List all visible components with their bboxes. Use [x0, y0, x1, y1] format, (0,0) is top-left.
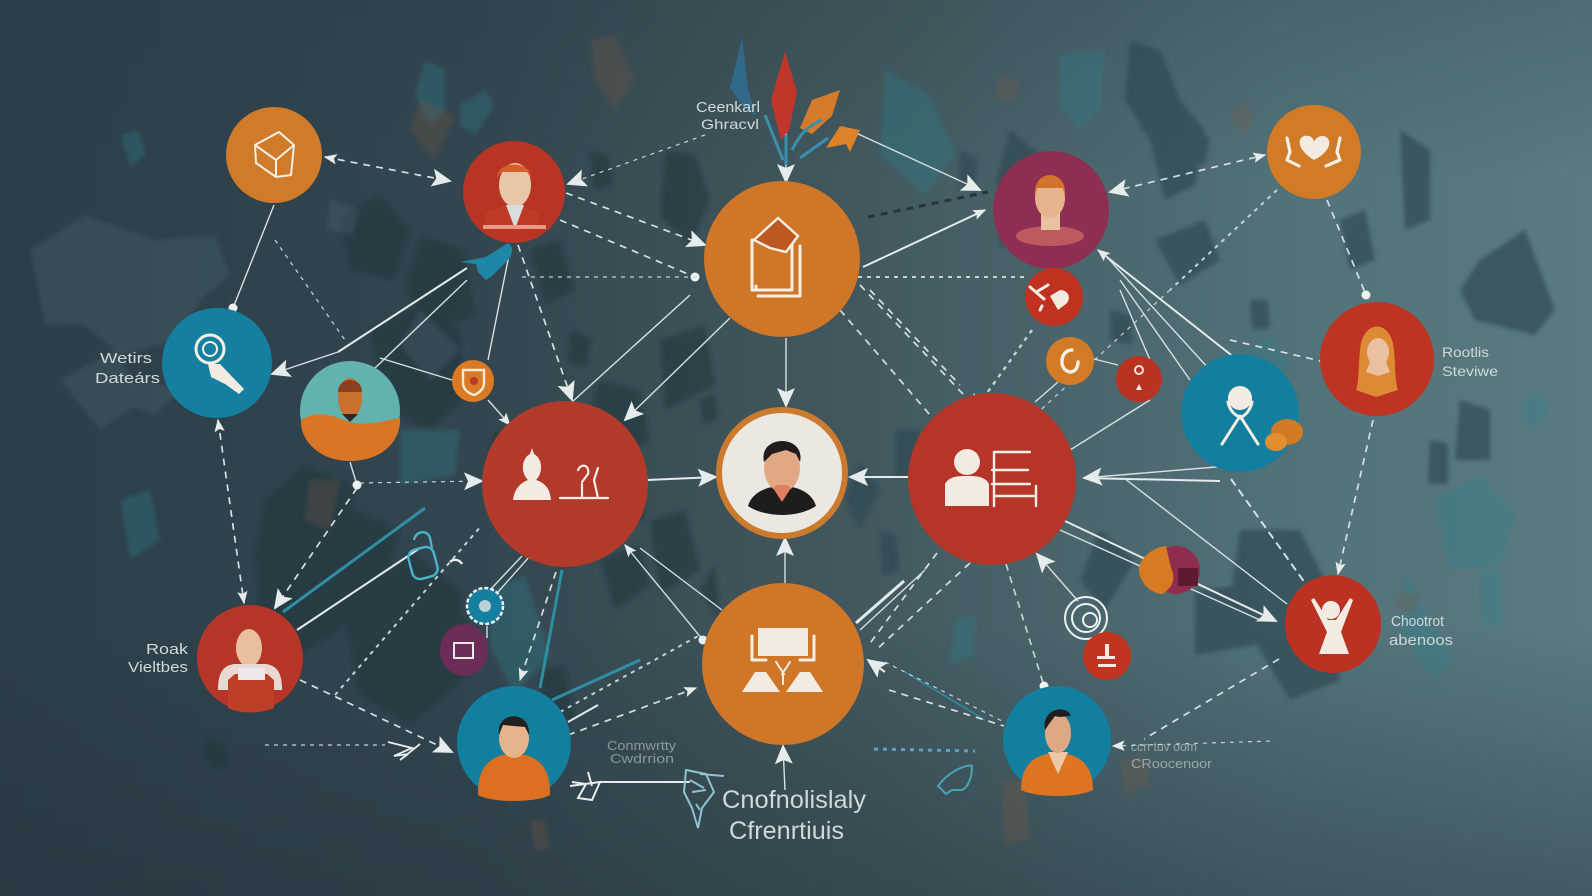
- node: plum person: [993, 151, 1109, 269]
- node: centre person: [716, 407, 848, 539]
- icon: orange and plum pie: [1139, 546, 1200, 594]
- node: red person top: [463, 141, 565, 243]
- label: main bottom caption: Cnofnolislaly: [722, 786, 866, 814]
- icon: orange fruit: [1265, 419, 1303, 451]
- node: orange heart: [1267, 105, 1361, 199]
- icon: person with orange hair: [483, 163, 546, 229]
- node: small red bird icon: [1025, 268, 1083, 326]
- label: bottom left node: Vieltbes: [128, 659, 188, 676]
- node: red person bottom left: [197, 605, 303, 712]
- label: right red woman node: [1442, 344, 1498, 379]
- icon: box: [255, 132, 294, 177]
- node: orange package: [226, 107, 322, 203]
- label: main bottom caption: [722, 786, 866, 845]
- icon: leaf fan at top: [730, 38, 860, 165]
- label: lower right faint: [1131, 739, 1213, 771]
- node: big red right: [908, 393, 1076, 565]
- node: teal and orange person: [300, 361, 400, 461]
- icon: teal gear: [467, 588, 503, 624]
- icon: scribble bird: [570, 772, 600, 800]
- node: teal figure: [1181, 354, 1303, 472]
- label: right red woman node: Rootlis: [1442, 344, 1489, 360]
- node: big orange bottom: [702, 583, 864, 745]
- label: lower centre faint: Conmwrtty: [607, 739, 677, 753]
- icon: person with apron: [218, 629, 282, 712]
- node: teal magnifier: [162, 308, 272, 418]
- node: red woman: [1320, 302, 1434, 416]
- label: right red figure node: Chootrot: [1391, 613, 1445, 630]
- node: small red tag icon: [1116, 356, 1162, 402]
- icon: figure with ribbons: [1222, 386, 1258, 444]
- connections into centre: [600, 115, 908, 790]
- label: lower centre faint: [607, 739, 677, 766]
- icon: person and bunk bed: [945, 449, 1036, 506]
- icon: Q with figure: [196, 335, 244, 394]
- icon: desk and screen: [742, 628, 823, 692]
- icon: person with collar: [1021, 709, 1093, 796]
- connections around bottom hub: [552, 545, 1004, 751]
- icon: teal rocket: [460, 243, 512, 280]
- connections from right cluster: [840, 127, 1373, 746]
- label: bottom left node: [128, 641, 189, 676]
- node: big red left: [482, 401, 648, 567]
- icon: teal padlock doodle: [407, 532, 462, 581]
- icon: heart with hands: [1287, 136, 1340, 166]
- label: left teal node: Wetirs: [100, 350, 152, 367]
- label: right red woman node: Steviwe: [1442, 363, 1498, 379]
- icon: raised arms figure: [1311, 598, 1353, 654]
- icon: person in orange shirt: [478, 716, 550, 801]
- icon: orange shield badge: [452, 360, 494, 402]
- label: main bottom caption: Cfrenrtiuis: [729, 817, 844, 845]
- label: left teal node: Dateárs: [95, 370, 160, 387]
- label: left teal node: [95, 350, 160, 387]
- label: right red figure node: abenoos: [1389, 632, 1453, 649]
- node: small orange link icon: [1046, 337, 1094, 385]
- icon: brain-like teal tree: [684, 770, 724, 828]
- label: top centre: Ghracvl: [701, 116, 759, 132]
- label: top centre: Ceenkarl: [696, 99, 760, 116]
- node: teal person bottom: [457, 686, 571, 801]
- icon: white doodle scribble: [388, 742, 420, 760]
- label: lower right faint: ccn tuv oom: [1131, 739, 1197, 754]
- node: small red stamp icon: [1083, 632, 1131, 680]
- label: lower centre faint: Cwdrrion: [610, 752, 674, 766]
- node: red figure with raised arms: [1285, 575, 1381, 673]
- icon: figures: [513, 448, 608, 500]
- connections from left cluster: [218, 135, 730, 752]
- label: top centre: [696, 99, 760, 132]
- label: right red figure node: [1389, 613, 1453, 649]
- icon: plum document: [440, 624, 488, 676]
- icon: envelope in folder: [752, 218, 800, 296]
- icon: faded teal leaf: [938, 766, 972, 794]
- icon: person in orange: [301, 378, 400, 461]
- icon: person: [1016, 175, 1084, 246]
- icon: person in black suit: [748, 441, 816, 515]
- label: lower right faint: CRoocenoor: [1131, 756, 1213, 771]
- label: bottom left node: Roak: [146, 641, 189, 658]
- node: teal person bottom right: [1003, 686, 1111, 796]
- node: big orange top: [704, 181, 860, 337]
- icon: woman: [1356, 326, 1398, 397]
- icon: spiral: [1065, 597, 1107, 639]
